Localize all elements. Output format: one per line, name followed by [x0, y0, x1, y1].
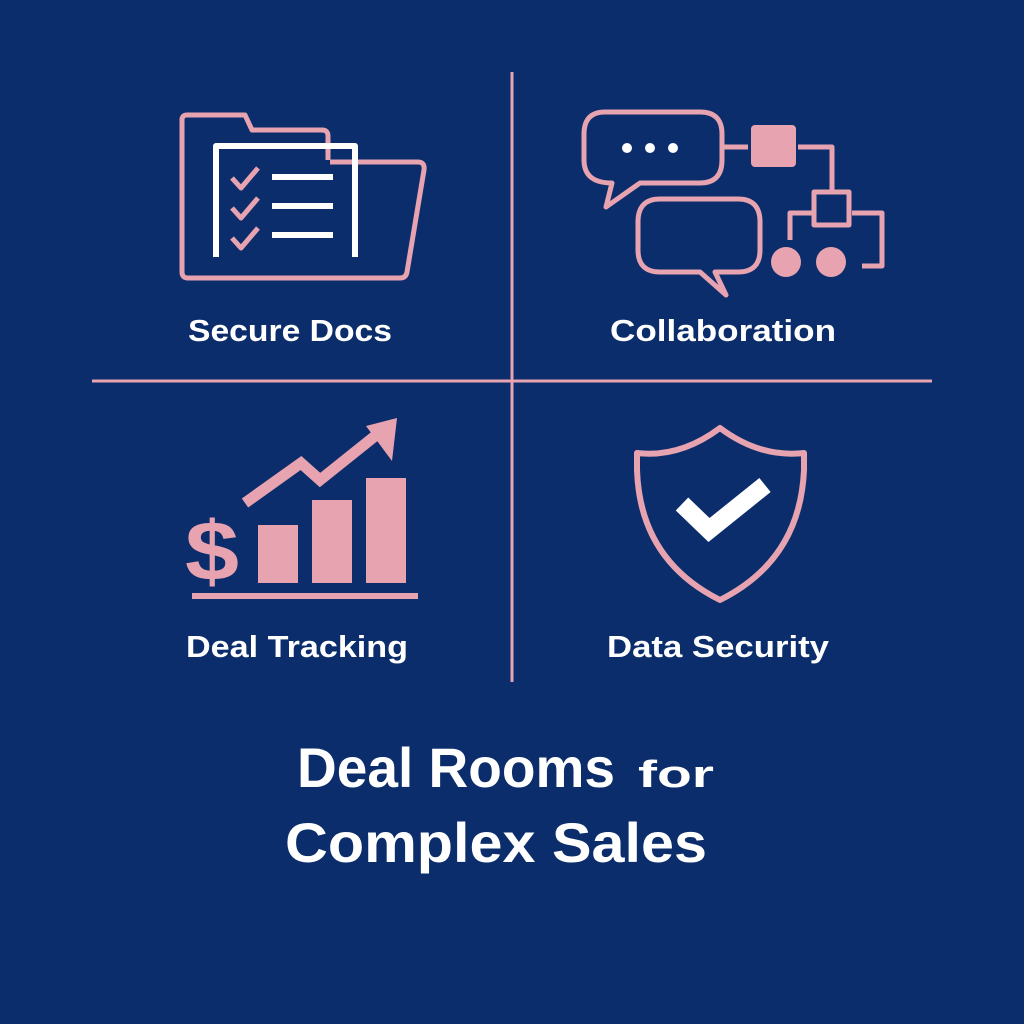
label: Deal Tracking: Deal Tracking	[186, 629, 408, 664]
icon: folder with checklist	[182, 115, 424, 278]
title	[285, 736, 714, 874]
label: Data Security: Data Security	[607, 629, 830, 664]
icon: shield	[637, 428, 804, 600]
icon: deal tracking chart: $	[185, 504, 239, 598]
label: Collaboration: Collaboration	[610, 313, 836, 348]
label: Secure Docs: Secure Docs	[188, 313, 392, 348]
icon: collaboration	[584, 112, 882, 295]
title: Deal Rooms	[297, 736, 615, 799]
title: Complex Sales	[285, 811, 707, 874]
title: for	[638, 754, 714, 796]
icon: deal tracking chart	[185, 418, 418, 599]
